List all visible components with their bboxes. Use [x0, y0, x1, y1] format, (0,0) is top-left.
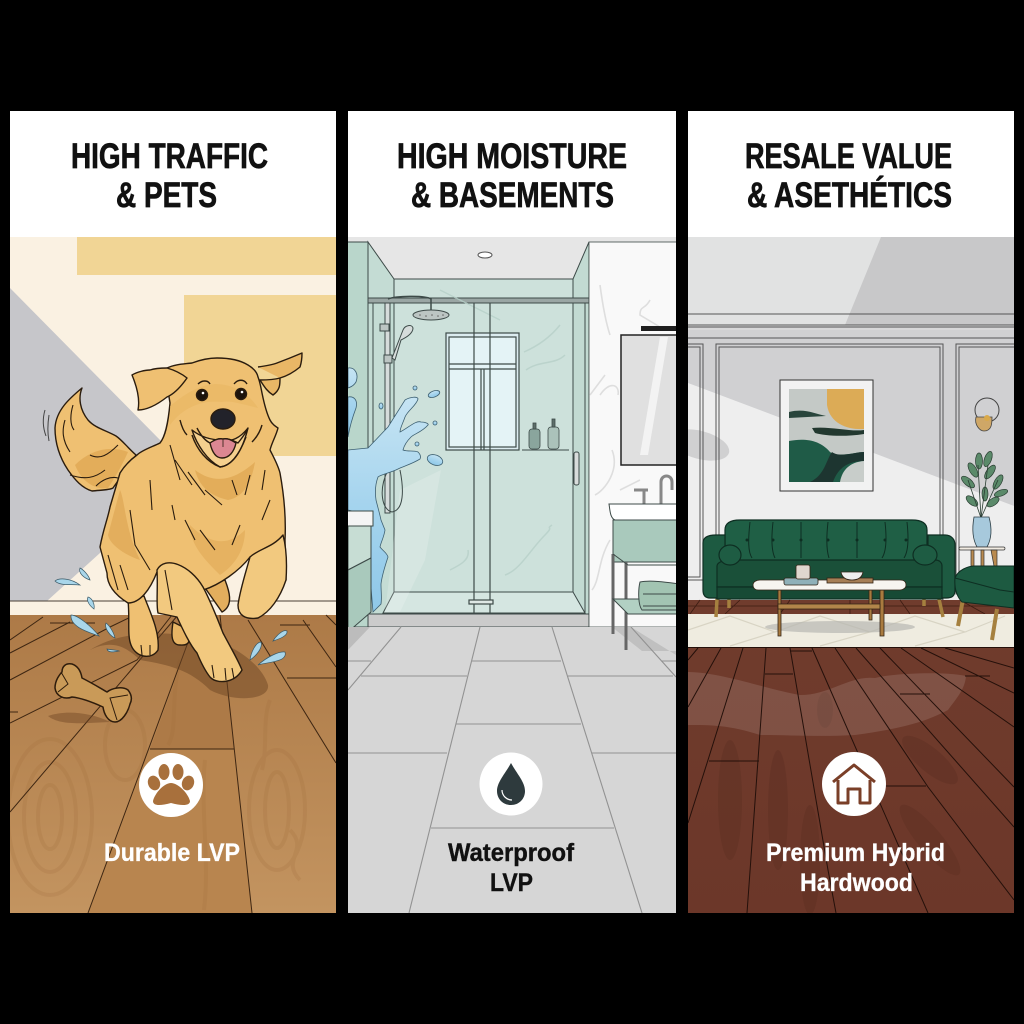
heading: resale value and aesthetics: RESALE VALUE — [745, 137, 952, 176]
shower enclosure — [340, 242, 589, 627]
heading: high traffic and pets — [10, 111, 336, 237]
icon: paw badge — [139, 753, 203, 817]
icon: house badge — [822, 752, 886, 816]
label: premium hybrid hardwood: Hardwood — [800, 869, 913, 897]
label: waterproof lvp: LVP — [490, 869, 533, 897]
recessed ceiling light — [478, 252, 492, 258]
vanity and sink — [608, 474, 676, 626]
mirror with light — [621, 326, 681, 465]
panel: high traffic and pets — [8, 111, 336, 913]
heading: high moisture and basements: HIGH MOISTURE — [397, 137, 627, 176]
stone tile floor — [348, 627, 676, 913]
side table — [959, 547, 1005, 566]
scene: room with dog — [8, 237, 336, 913]
panel: high moisture and basements — [340, 111, 681, 913]
framed abstract art — [780, 380, 873, 491]
marble veins — [440, 290, 565, 575]
label: premium hybrid hardwood — [766, 839, 945, 897]
white marble wall — [589, 242, 679, 627]
scene: living room — [667, 237, 1024, 915]
coffee table with decor — [753, 565, 906, 636]
body and head silhouette — [100, 358, 286, 603]
wall moulding — [670, 314, 1024, 607]
heading: high moisture and basements: & BASEMENTS — [411, 176, 614, 215]
label: waterproof lvp: Waterproof — [448, 839, 575, 867]
wood floor — [8, 615, 336, 913]
heading: high traffic and pets: & PETS — [116, 176, 217, 215]
heading: high traffic and pets: HIGH TRAFFIC — [71, 137, 268, 176]
heading: resale value and aesthetics: & ASETHÉTICS — [747, 175, 952, 215]
green ottoman — [955, 566, 1014, 640]
bottles on shelf — [522, 419, 569, 450]
bone toy — [55, 664, 131, 722]
icon: water drop badge — [480, 752, 542, 816]
green sofa — [703, 520, 955, 617]
label: durable lvp: Durable LVP — [104, 839, 240, 867]
dog illustration — [55, 353, 302, 682]
shadow under dog — [90, 633, 268, 698]
panel: resale value and aesthetics — [667, 111, 1024, 915]
area rug — [688, 614, 1014, 648]
scene: bathroom — [340, 237, 681, 913]
water droplets — [55, 568, 287, 665]
motion lines — [43, 410, 49, 441]
dark wood floor — [688, 600, 1014, 915]
water splash — [348, 368, 444, 612]
wall sconce — [975, 398, 999, 431]
glass door panel — [469, 303, 493, 613]
heading: high moisture and basements — [348, 111, 676, 237]
plant in vase — [960, 450, 1009, 547]
window — [446, 333, 519, 450]
left vanity — [348, 510, 374, 627]
heading: resale value and aesthetics — [688, 111, 1014, 237]
label: premium hybrid hardwood: Premium Hybrid — [766, 839, 945, 867]
shower head and rail — [380, 296, 449, 513]
label: waterproof lvp — [448, 842, 574, 892]
